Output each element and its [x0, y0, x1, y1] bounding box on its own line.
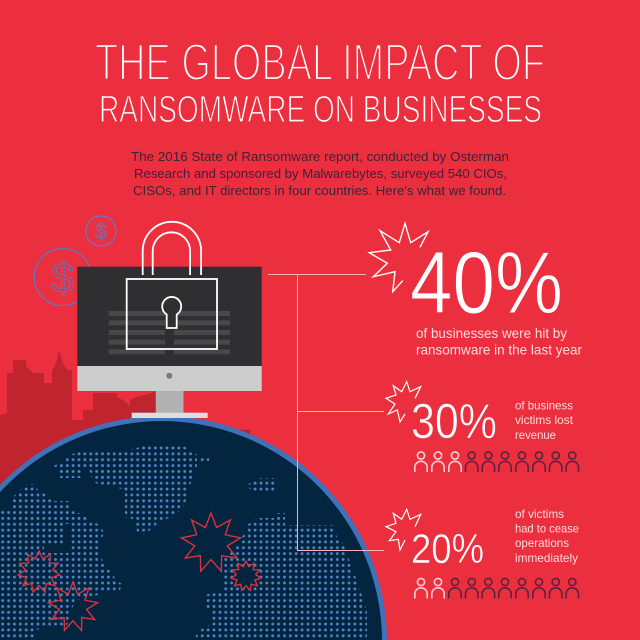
intro text: CISOs, and IT directors in four countries. Here's what we found. [133, 183, 506, 198]
monitor with padlock [77, 222, 262, 418]
caption 40%: ransomware in the last year [416, 342, 582, 358]
number 30%: 30% [411, 395, 497, 449]
monitor chin [77, 366, 262, 391]
monitor screen [77, 267, 262, 366]
icon: explosion star small [231, 561, 261, 590]
caption 20%: had to cease [515, 522, 579, 536]
dotted world map [0, 444, 367, 640]
icon: explosion star centre [181, 513, 241, 571]
globe blue rim [0, 416, 387, 640]
caption 30% [515, 398, 574, 442]
globe [0, 416, 387, 640]
screen text lines [109, 311, 230, 354]
caption 40% [416, 325, 582, 358]
globe ocean [0, 421, 382, 640]
intro text [131, 149, 509, 198]
intro text: The 2016 State of Ransomware report, conducted by Osterman [131, 149, 509, 164]
icon: small dollar coin: $ [95, 219, 107, 244]
title [95, 34, 545, 131]
icon: large dollar coin [34, 248, 91, 306]
people row 3 of 10 [415, 452, 578, 472]
icon: burst 20 [386, 509, 421, 550]
icon: explosion star bottom [48, 582, 98, 630]
caption 30%: of business [515, 398, 573, 412]
icon: large dollar coin: $ [51, 254, 74, 301]
number 20%: 20% [411, 525, 484, 572]
caption 20% [515, 507, 579, 565]
intro text: Research and sponsored by Malwarebytes, surveyed 540 CIOs, [134, 166, 507, 181]
city skyline [0, 350, 250, 500]
stat: 40 percent [369, 223, 582, 358]
caption 20%: immediately [515, 551, 578, 565]
icon: burst 40 [369, 223, 428, 292]
caption 40%: of businesses were hit by [416, 325, 567, 341]
padlock [127, 222, 217, 349]
caption 20%: operations [515, 536, 569, 550]
icon: burst 30 [386, 382, 421, 422]
number 40%: 40% [410, 233, 563, 332]
caption 30%: victims lost [515, 413, 574, 427]
monitor stand [156, 391, 184, 413]
icon: explosion star left [18, 551, 60, 592]
icon: small dollar coin [86, 216, 116, 246]
connector lines [268, 274, 384, 550]
people row 2 of 10 [415, 578, 578, 598]
monitor base [132, 413, 208, 418]
power button [166, 373, 172, 379]
caption 20%: of victims [515, 507, 564, 521]
stat: 20 percent [386, 507, 579, 598]
caption 30%: revenue [515, 428, 556, 442]
stat: 30 percent [386, 382, 578, 472]
